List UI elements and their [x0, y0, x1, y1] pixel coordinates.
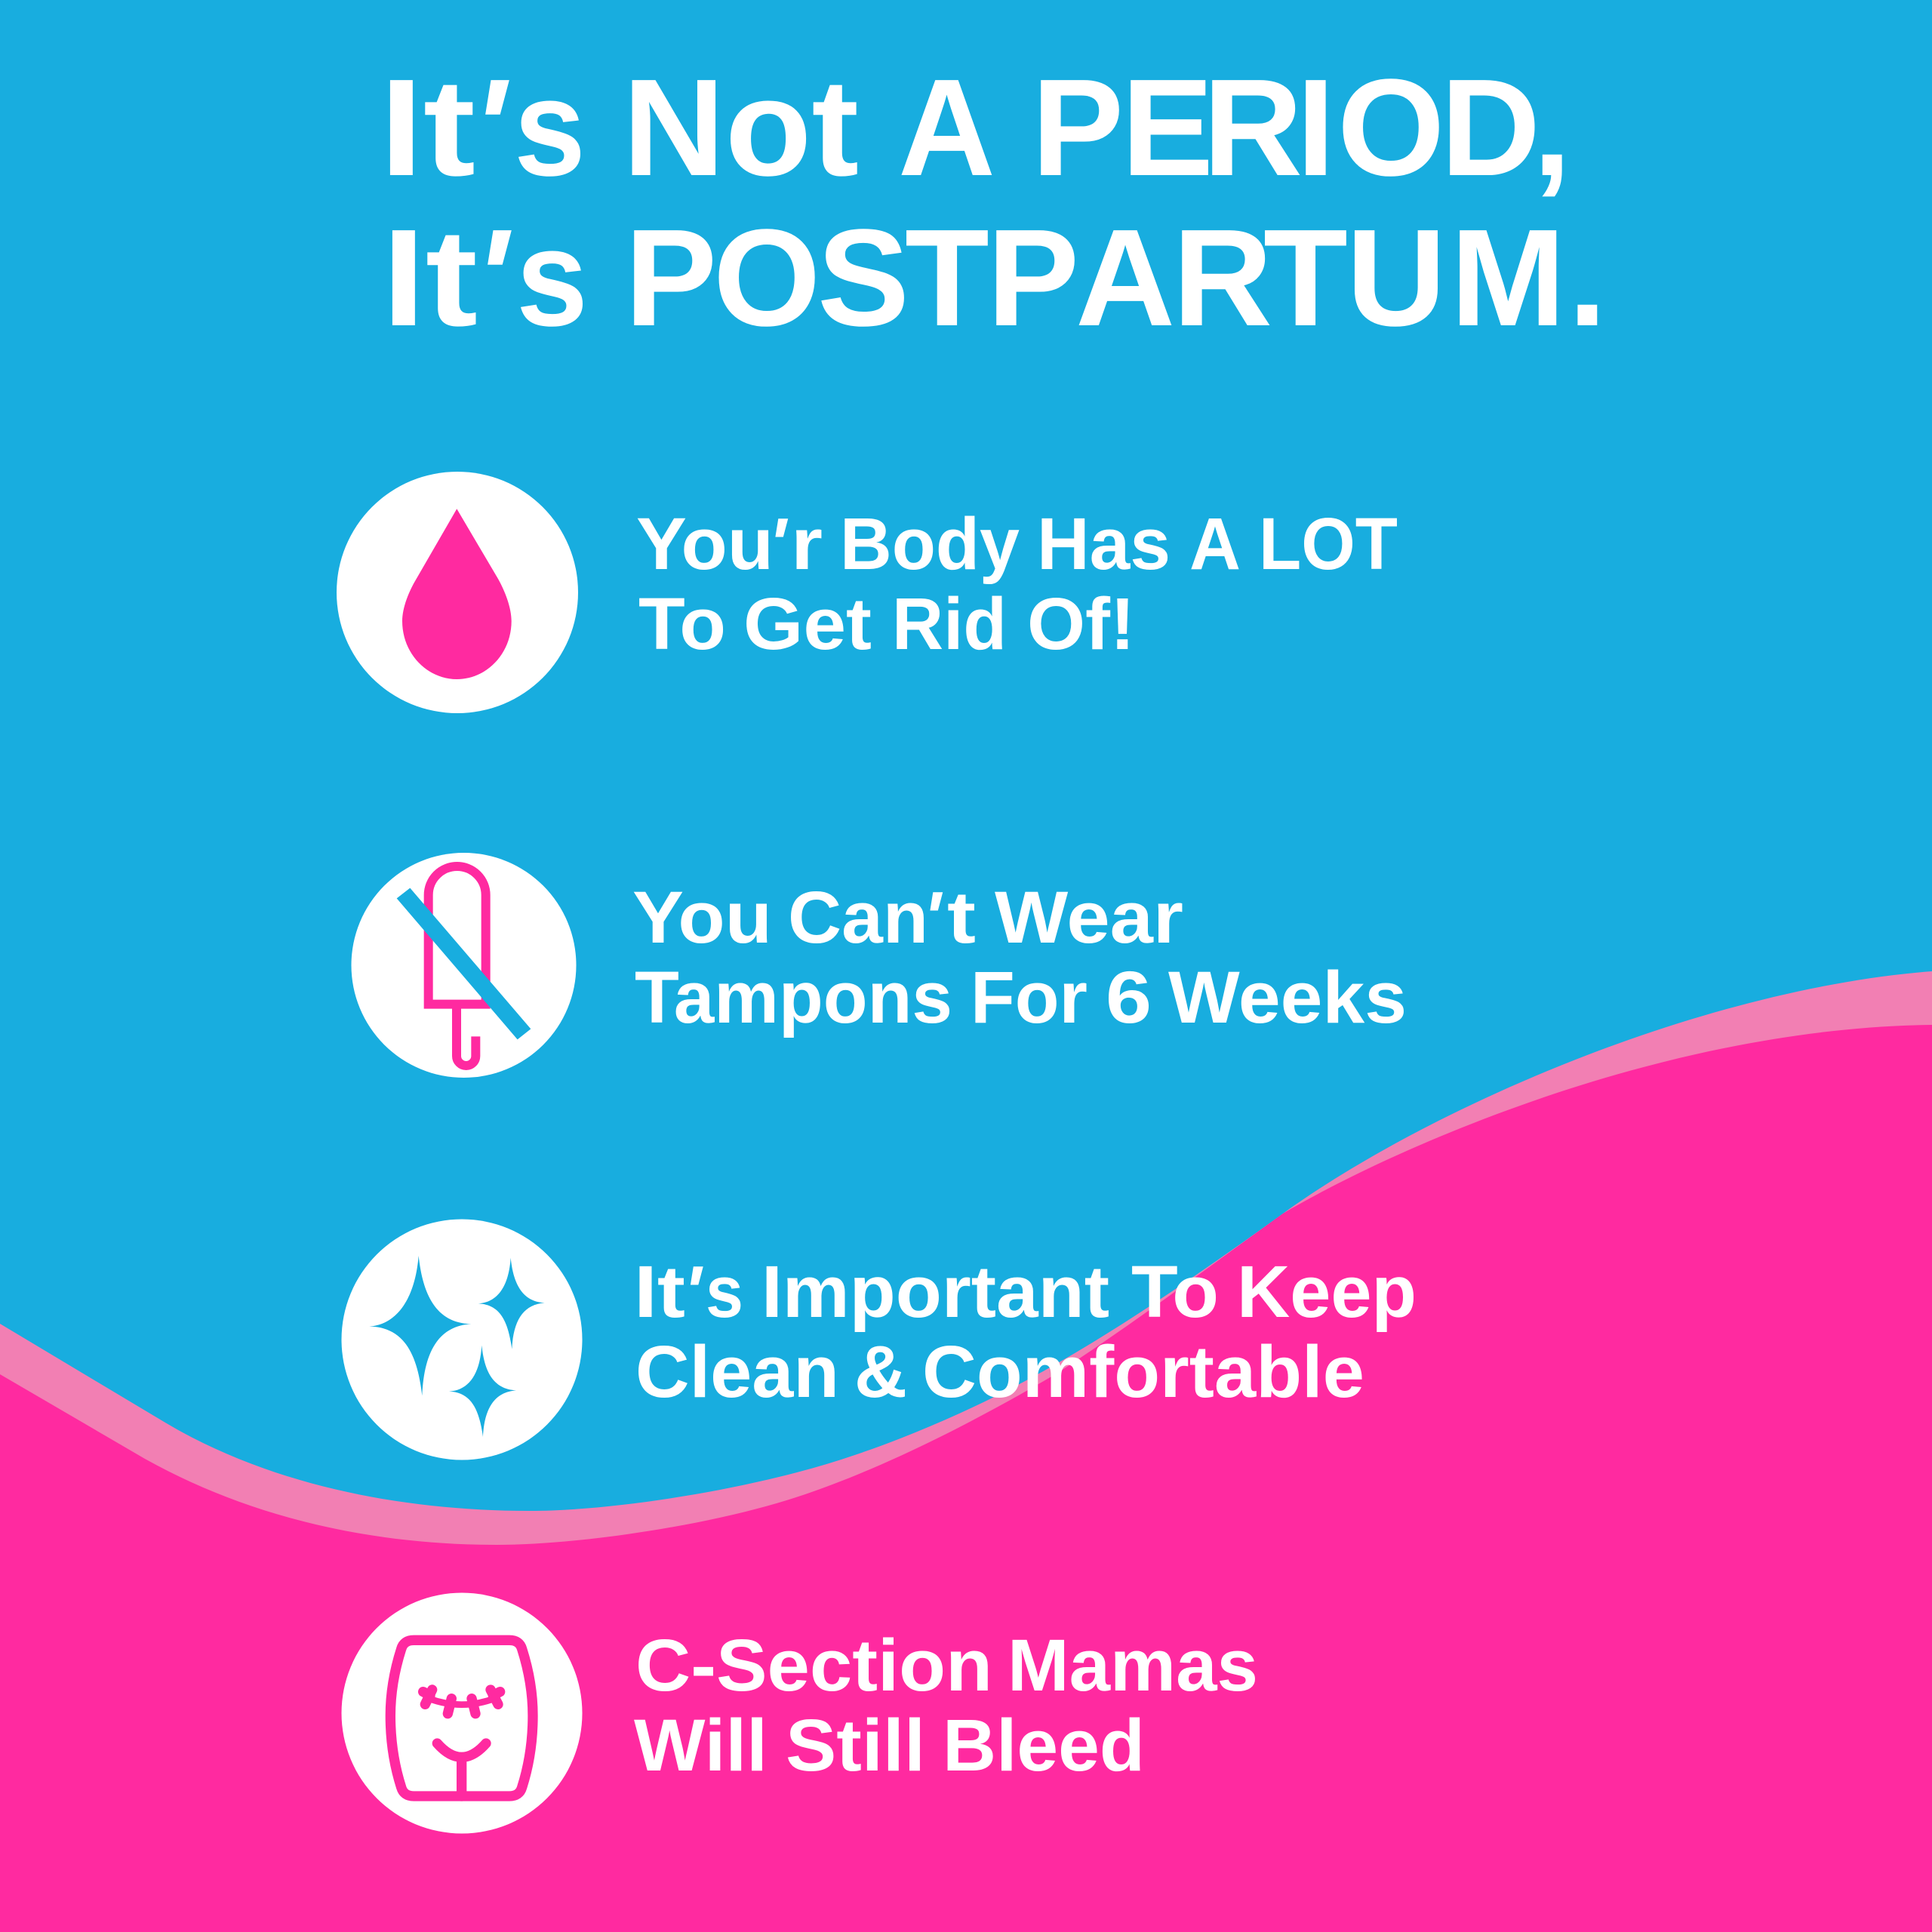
item 3: text: It — [634, 1251, 685, 1333]
wave: light pink band — [0, 971, 1932, 1932]
title: It — [382, 200, 478, 355]
item 1: text: ' — [761, 503, 795, 585]
item 1: text — [636, 503, 1398, 665]
item 2: text: For — [971, 956, 1088, 1038]
item 3: text: s — [706, 1251, 743, 1333]
item 1: text: To — [638, 583, 726, 665]
item 4: c-section icon — [341, 1592, 583, 1834]
item 3: text: Comfortable — [922, 1331, 1364, 1413]
item 2: no tampon icon — [352, 853, 577, 1078]
item 3: text: Important — [761, 1251, 1109, 1333]
item 1: text: r — [791, 503, 823, 585]
item 1: text: You — [636, 503, 774, 585]
title: s — [514, 50, 586, 205]
item 4: text: Will — [634, 1704, 768, 1786]
item 2: text: t — [947, 876, 976, 958]
title: POSTPARTUM. — [625, 200, 1607, 355]
title: Not — [623, 50, 859, 205]
title: A — [898, 50, 995, 205]
item 2: text: You — [632, 876, 772, 958]
item 1: text: Rid — [892, 583, 1007, 665]
item 4: text: Mamas — [1008, 1624, 1258, 1706]
item 2: text: Wear — [995, 876, 1183, 958]
item 4: text — [634, 1624, 1258, 1786]
item 3: text: ' — [675, 1251, 710, 1333]
title: s — [516, 200, 588, 355]
item 1: text: A — [1189, 503, 1241, 585]
item 2: text — [632, 876, 1407, 1038]
item 2: text: Weeks — [1168, 956, 1407, 1038]
item 1: text: Body — [840, 503, 1020, 585]
item 1: text: Has — [1037, 503, 1171, 585]
item 1: text: Of! — [1027, 583, 1135, 665]
title: ' — [460, 201, 525, 355]
item 2: text: 6 — [1106, 956, 1152, 1038]
item 4: text: Bleed — [943, 1704, 1145, 1786]
item 4: text: C-Section — [635, 1624, 992, 1706]
item 1: text: Get — [743, 583, 872, 665]
item 1: drop icon — [337, 472, 578, 713]
title: It — [380, 50, 475, 205]
item 3: text — [634, 1251, 1417, 1413]
title — [380, 50, 1607, 355]
item 3: text: Clean — [635, 1331, 839, 1413]
item 3: text: To — [1131, 1251, 1219, 1333]
title: ' — [457, 51, 523, 205]
item 3: sparkles icon — [341, 1220, 583, 1460]
title: PERIOD, — [1032, 50, 1571, 205]
item 1: text: LOT — [1259, 503, 1398, 585]
item 4: text: Still — [786, 1704, 925, 1786]
item 2: text: Tampons — [635, 956, 952, 1038]
item 3: text: Keep — [1237, 1251, 1417, 1333]
item 3: text: & — [854, 1331, 907, 1413]
item 2: text: Can — [788, 876, 928, 958]
item 2: text: ' — [915, 876, 950, 958]
wave: hot pink area — [0, 1025, 1932, 1932]
